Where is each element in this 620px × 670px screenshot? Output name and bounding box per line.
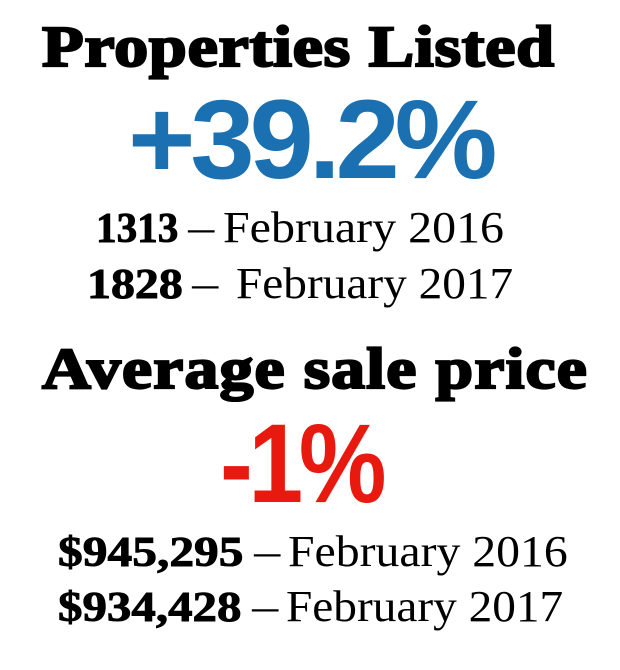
text: $934,428 February 2017: $934,428 bbox=[58, 585, 241, 631]
text: $945,295 February 2016 bbox=[58, 527, 568, 576]
text: 1828 February 2017 bbox=[87, 259, 513, 308]
text: $934,428 February 2017 bbox=[58, 582, 563, 631]
text: 1313 February 2016 bbox=[96, 203, 504, 252]
text: 1313 February 2016: February 2016 bbox=[223, 203, 504, 252]
stat: +39.2%: +39.2% bbox=[128, 77, 492, 202]
stat: -1%: -1% bbox=[220, 401, 382, 526]
text: 1828 February 2017: February 2017 bbox=[236, 259, 513, 308]
text: $945,295 February 2016: $945,295 bbox=[58, 530, 244, 576]
text: 1313 February 2016: — bbox=[188, 203, 214, 252]
text: $945,295 February 2016: February 2016 bbox=[288, 527, 568, 576]
heading: Average sale price: Average sale price bbox=[42, 336, 588, 401]
text: $934,428 February 2017: February 2017 bbox=[286, 582, 563, 631]
text: $945,295 February 2016: — bbox=[254, 527, 280, 576]
text: $934,428 February 2017: — bbox=[252, 582, 278, 631]
heading: Properties Listed: Properties Listed bbox=[42, 14, 555, 79]
text: 1828 February 2017: — bbox=[192, 259, 218, 308]
text: 1313 February 2016: 1313 bbox=[96, 206, 178, 252]
text: 1828 February 2017: 1828 bbox=[87, 262, 183, 308]
